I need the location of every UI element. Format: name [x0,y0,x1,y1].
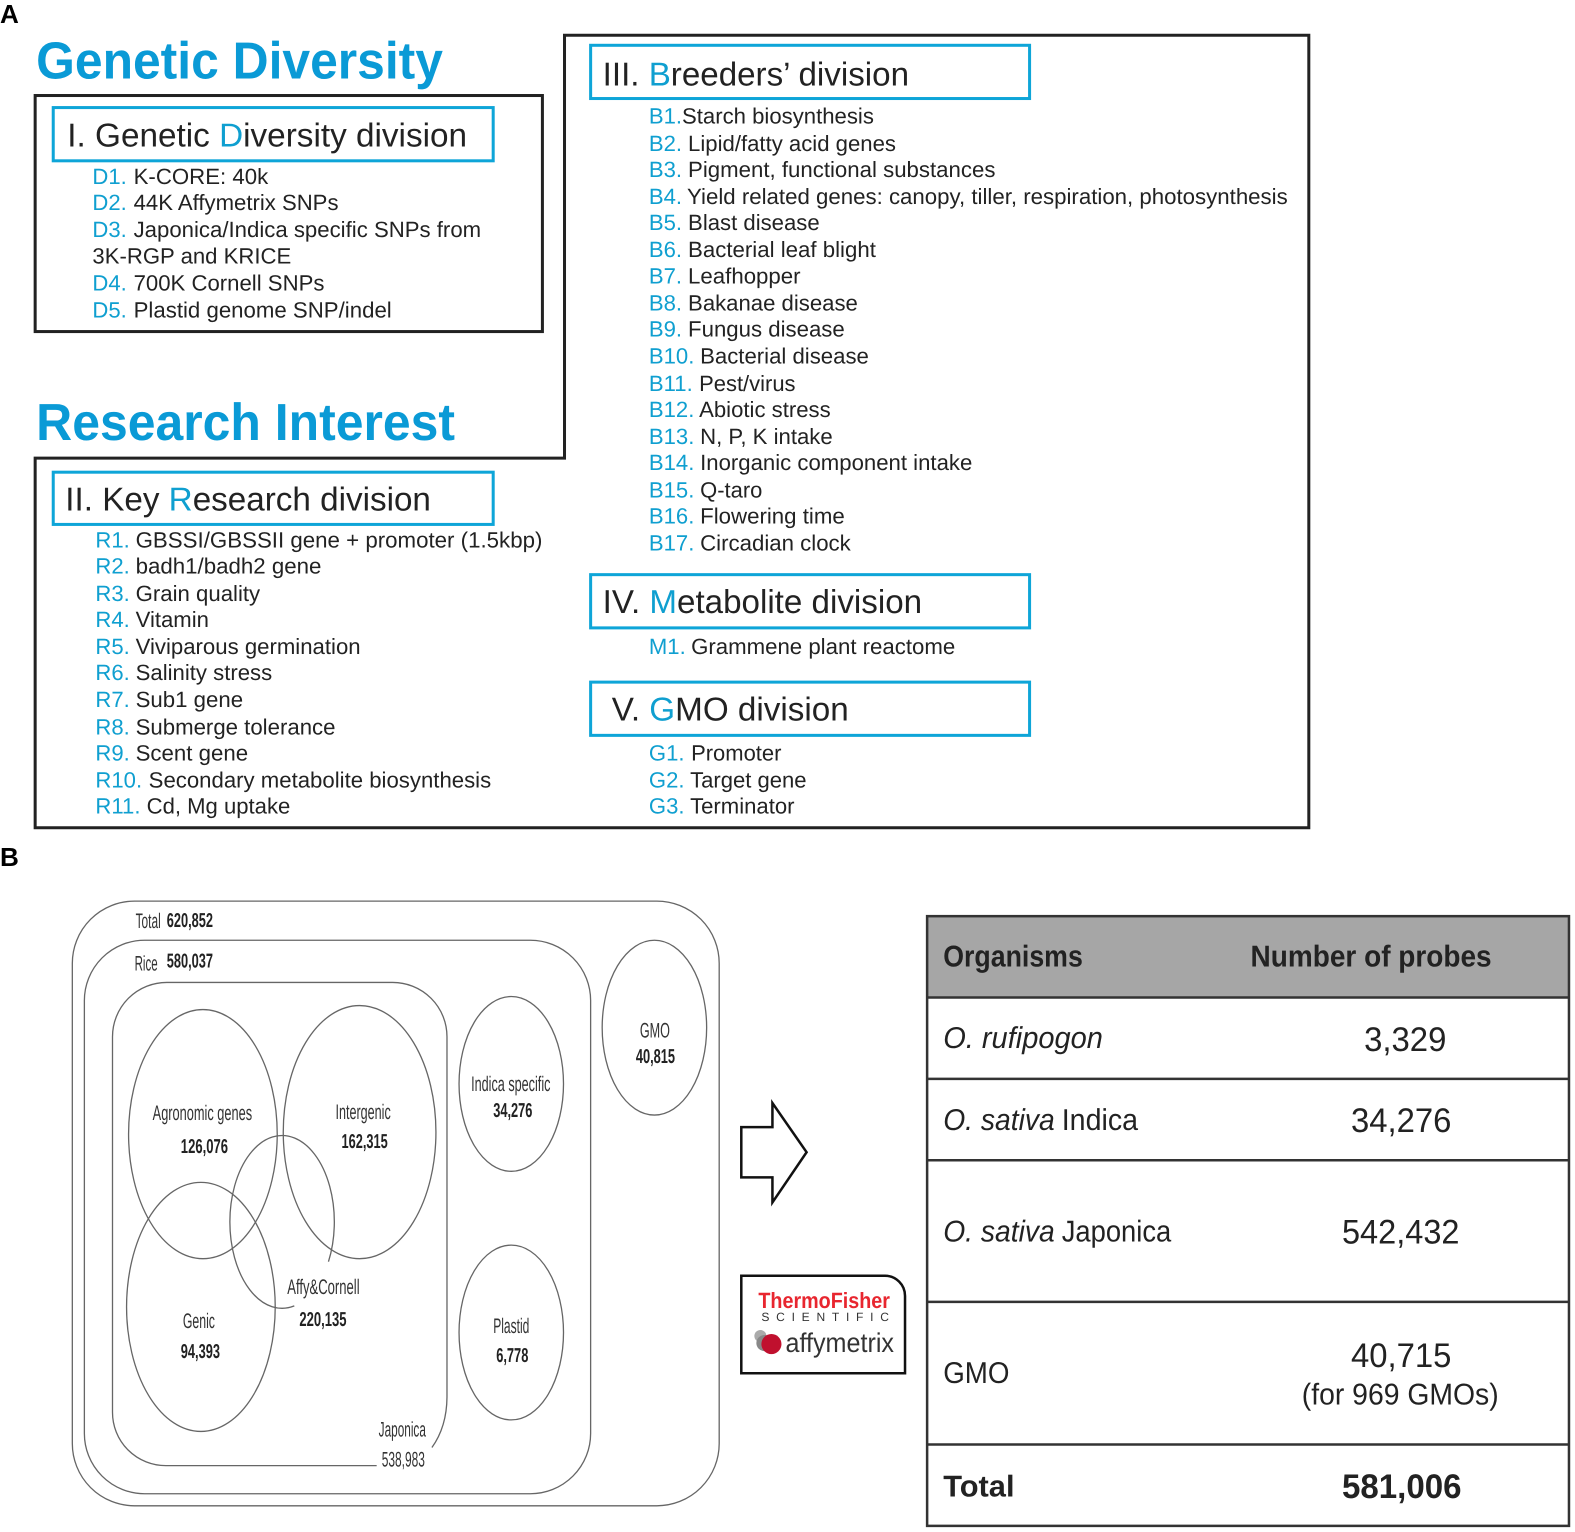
set: Indica specific [459,997,564,1171]
list: B items: Blast disease [688,210,820,235]
set: GMO: GMO [640,1020,670,1043]
list: B items: Flowering time [700,503,845,528]
list: B items: B10. [649,344,694,369]
row: O. sativa Indica [943,1102,1451,1140]
row: O. sativa Japonica: O. sativa [943,1215,1055,1249]
list: B items: B16. [649,503,694,528]
set: Japonica: 538,983 [382,1449,425,1472]
division title V: V. GMO division [612,690,849,727]
row: O. sativa Indica: Indica [1062,1104,1138,1137]
list: R items: R5. [95,634,130,659]
list: B items: Bakanae disease [688,290,858,315]
list: B items: Inorganic component intake [700,450,972,475]
list: G items: G1. [649,740,685,765]
list: B items: B13. [649,424,694,449]
table: organisms and probe counts [927,916,1569,1526]
list: G items: Target gene [690,768,807,793]
list: B items: B9. [649,317,682,342]
row: O. sativa Japonica: 542,432 [1342,1213,1459,1252]
set: Intergenic: 162,315 [342,1131,388,1153]
list: D items: Plastid genome SNP/indel [134,297,392,323]
list: B items: Fungus disease [688,317,845,342]
list: B items: B2. [649,131,682,156]
row: GMO: 40,715 [1351,1337,1451,1375]
set: Total [72,901,719,1506]
list: R items: Viviparous germination [136,634,361,659]
set: Genic [127,1182,275,1431]
list: B items: B15. [649,477,694,502]
list: R items: R11. [95,794,140,819]
list: B items: B1. [649,104,682,129]
logo: Thermo Fisher Scientific affymetrix: SCIENTIFIC [761,1310,889,1324]
division title II: II. Key Research division [65,480,431,517]
set: Plastid: 6,778 [496,1345,528,1367]
logo: Thermo Fisher Scientific affymetrix: affymetrix [785,1328,894,1358]
row: Total [943,1468,1461,1506]
list: D items: 44K Affymetrix SNPs [134,190,339,215]
list: B items: Starch biosynthesis [682,104,874,129]
list: D items [92,164,481,323]
row: O. sativa Japonica: Japonica [1062,1215,1171,1249]
list: B items: Q-taro [700,477,762,502]
list: D items: D1. [92,164,127,189]
set: Rice: Rice [135,952,158,975]
row: GMO [943,1337,1499,1411]
row: O. sativa Indica: 34,276 [1351,1102,1451,1140]
list: G items: G3. [649,794,685,819]
list: D items: D4. [92,270,127,295]
list: R items: Vitamin [136,607,209,632]
row: Total: 581,006 [1342,1468,1461,1506]
division title I: I. Genetic Diversity division [67,117,467,154]
list: B items [649,104,1288,556]
list: B items: Circadian clock [700,530,852,556]
panel: Genetic Diversity division [35,96,542,332]
list: G items [649,740,807,819]
list: D items: 700K Cornell SNPs [134,270,324,295]
list: R items: Submerge tolerance [136,714,335,739]
set: Plastid: Plastid [493,1315,529,1338]
list: B items: Leafhopper [688,263,801,288]
list: R items [95,527,542,819]
list: G items: Promoter [691,740,781,765]
list: R items: R1. [95,527,130,553]
set: Rice: 580,037 [167,950,213,972]
list: B items: Abiotic stress [699,397,831,422]
set: GMO [602,940,707,1115]
panel: Research Interest outline with divisions II to V [35,35,1309,828]
list: R items: Sub1 gene [136,687,243,712]
list: M items: M1. [649,634,686,659]
list: D items: 3K-RGP and KRICE [92,243,291,268]
list: R items: badh1/badh2 gene [136,554,321,579]
row: O. sativa Indica: O. sativa [943,1104,1055,1137]
arrow [741,1103,807,1202]
set: Intergenic: Intergenic [335,1101,391,1124]
division title V [591,682,1030,735]
row: O. sativa Japonica [943,1213,1459,1252]
list: R items: R4. [95,607,130,632]
list: D items: K-CORE: 40k [134,164,269,189]
row: O. rufipogon: 3,329 [1364,1021,1446,1059]
set: GMO: 40,815 [636,1046,675,1068]
list: B items: Yield related genes: canopy, tiller, respiration, photosynthesis [687,184,1288,209]
list: B items: Bacterial disease [700,344,869,369]
set: Indica specific: Indica specific [471,1073,550,1096]
row: O. rufipogon: O. rufipogon [943,1022,1103,1055]
list: R items: Scent gene [136,740,248,765]
set: Agronomic genes: 126,076 [181,1136,228,1158]
list: R items: R9. [95,740,130,765]
list: B items: B6. [649,237,682,262]
set: Affy and Cornell [230,1136,360,1331]
list: D items: D2. [92,190,127,215]
set: Affy and Cornell: Affy&Cornell [287,1276,360,1299]
list: B items: B12. [649,397,694,422]
set: Japonica [112,982,447,1472]
list: B items: Pest/virus [699,371,796,396]
division title I [53,108,493,161]
list: R items: R8. [95,714,130,739]
list: M items: Grammene plant reactome [691,634,955,659]
division title III: III. Breeders’ division [603,55,909,93]
table header [943,940,1492,973]
list: R items: Salinity stress [136,660,272,685]
list: B items: B5. [649,210,682,235]
diagram: nested probe set Venn [72,901,719,1506]
list: R items: GBSSI/GBSSII gene + promoter (1.5kbp) [136,527,542,553]
set: Affy and Cornell: 220,135 [299,1309,347,1331]
list: R items: R2. [95,554,130,579]
set: Indica specific: 34,276 [493,1100,532,1122]
row: GMO: GMO [943,1357,1009,1390]
list: R items: R7. [95,687,130,712]
division title IV: IV. Metabolite division [603,583,922,620]
set: Intergenic [283,1006,436,1259]
division title II [53,472,493,524]
list: B items: B3. [649,157,682,182]
division title III [591,45,1030,99]
set: Rice [84,940,591,1494]
logo: Thermo Fisher Scientific affymetrix: ThermoFisher [758,1288,890,1313]
label: B: B [0,842,19,872]
row: Total: Total [943,1471,1015,1504]
set: Agronomic genes: Agronomic genes [153,1102,252,1125]
set: Genic: 94,393 [181,1341,220,1363]
set: Total: Total [136,910,161,933]
logo: Thermo Fisher Scientific affymetrix [741,1276,905,1373]
table header: Number of probes [1251,940,1492,973]
list: B items: Bacterial leaf blight [688,237,876,262]
list: R items: Secondary metabolite biosynthesis [149,768,491,793]
list: D items: Japonica/Indica specific SNPs from [134,217,481,242]
set: Genic: Genic [183,1310,215,1333]
heading: Genetic Diversity: Genetic Diversity [36,32,443,90]
set: Plastid [459,1245,564,1420]
list: G items: G2. [649,768,685,793]
list: B items: B4. [649,184,682,209]
list: B items: Lipid/fatty acid genes [688,131,896,156]
set: Japonica: Japonica [379,1418,426,1442]
list: B items: B17. [649,530,694,556]
set: Total: 620,852 [167,910,213,932]
row: GMO: (for 969 GMOs) [1302,1378,1499,1411]
list: B items: Pigment, functional substances [688,157,995,182]
list: B items: N, P, K intake [700,424,833,449]
list: B items: B11. [649,371,693,396]
list: D items: D3. [92,217,127,242]
row: O. rufipogon [943,1021,1446,1059]
division title IV [591,575,1030,628]
set: Agronomic genes [129,1010,277,1259]
list: R items: Cd, Mg uptake [147,794,290,819]
table header: Organisms [943,940,1083,973]
list: D items: D5. [92,297,127,323]
list: R items: R3. [95,581,130,606]
list: B items: B14. [649,450,694,475]
list: R items: R10. [95,768,142,793]
list: B items: B8. [649,290,682,315]
list: G items: Terminator [690,794,795,819]
heading: Research Interest: Research Interest [36,394,455,452]
list: B items: B7. [649,263,682,288]
list: R items: Grain quality [136,581,260,606]
list: R items: R6. [95,660,130,685]
